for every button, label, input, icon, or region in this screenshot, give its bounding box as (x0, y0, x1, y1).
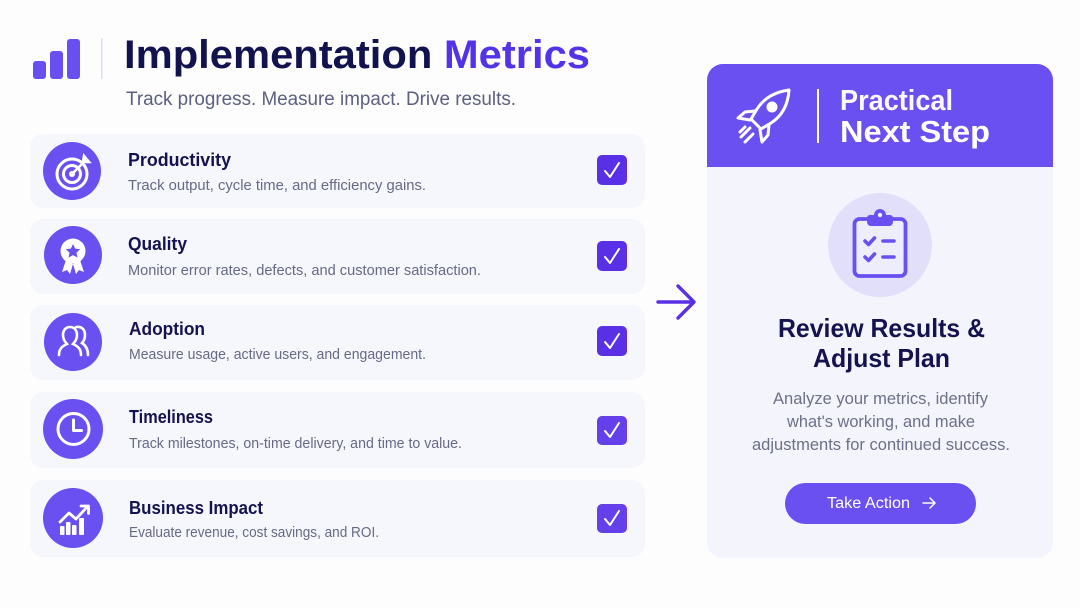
next step description: Analyze your metrics, identify (773, 390, 989, 408)
panel: adoption (30, 305, 645, 380)
heading: adoption: Adoption (129, 319, 205, 339)
icon: clipboard checklist (828, 193, 932, 297)
icon: growth chart (43, 488, 103, 548)
button: take action: Take Action (827, 495, 910, 512)
next step description (752, 390, 1010, 454)
panel header: Next Step (840, 114, 990, 149)
arrow (658, 286, 694, 318)
button: take action (785, 483, 976, 524)
panel header (707, 64, 1053, 167)
description: adoption: Measure usage, active users, and engagement. (129, 347, 426, 363)
heading: productivity: Productivity (128, 150, 231, 170)
icon: bar chart logo (33, 39, 80, 79)
heading: business impact: Business Impact (129, 498, 263, 518)
icon: target (43, 142, 101, 200)
next step description: adjustments for continued success. (752, 436, 1010, 454)
title: Implementation Metrics (124, 33, 590, 77)
description: productivity: Track output, cycle time, and efficiency gains. (128, 178, 426, 194)
panel: business impact (30, 480, 645, 557)
next step description: what's working, and make (786, 413, 975, 431)
heading: quality: Quality (128, 234, 187, 254)
panel: quality (30, 219, 645, 294)
checkbox: adoption (597, 326, 627, 356)
icon: users (44, 313, 102, 371)
description: business impact: Evaluate revenue, cost savings, and ROI. (129, 525, 379, 541)
panel: timeliness (30, 392, 645, 468)
subtitle: Track progress. Measure impact. Drive results. (126, 89, 516, 110)
header title: Practical (840, 85, 953, 117)
heading: timeliness: Timeliness (129, 407, 213, 427)
checkbox: timeliness (597, 416, 627, 445)
description: quality: Monitor error rates, defects, and customer satisfaction. (128, 263, 481, 279)
panel: productivity (30, 134, 645, 208)
next step heading: Review Results & (778, 313, 985, 343)
icon: clock (43, 399, 103, 459)
description: timeliness: Track milestones, on-time delivery, and time to value. (129, 436, 462, 452)
panel: practical next step (707, 64, 1053, 558)
next step heading: Adjust Plan (813, 343, 950, 373)
next step heading (778, 313, 985, 373)
checkbox: business impact (597, 504, 627, 533)
icon: rocket (738, 90, 789, 142)
checkbox: productivity (597, 155, 627, 185)
checkbox: quality (597, 241, 627, 271)
icon: award ribbon (44, 226, 102, 284)
